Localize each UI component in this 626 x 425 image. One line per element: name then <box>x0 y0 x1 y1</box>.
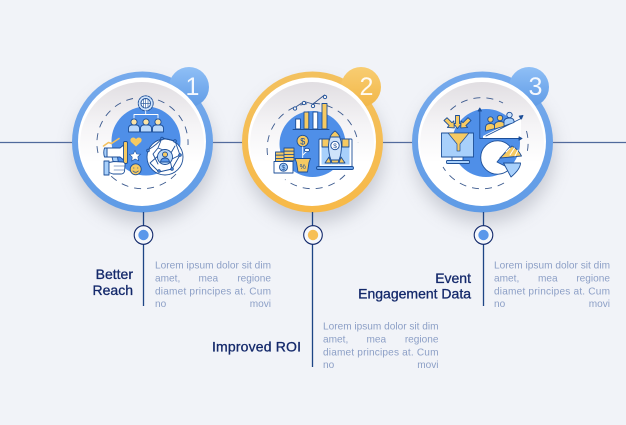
circle 2 <box>242 67 384 223</box>
circle 3 <box>412 67 554 223</box>
description 3: no <box>494 299 506 310</box>
badge number 3: 3 <box>529 73 542 101</box>
description 1: mea <box>198 274 219 284</box>
description 2: mea <box>366 334 387 346</box>
description 2: movi <box>417 360 438 371</box>
step 2: Improved ROI <box>212 67 439 371</box>
description 2: Lorem ipsum dolor sit dim <box>323 322 438 332</box>
icon: event engagement data <box>442 98 528 189</box>
description 1: diamet principes at. Cum <box>155 286 271 298</box>
description 3: movi <box>589 299 610 310</box>
connector line and node 3 <box>474 212 493 306</box>
title: Better Reach: Reach <box>93 282 133 298</box>
description 3: Lorem ipsum dolor sit dim <box>494 260 610 272</box>
title: Event Engagement Data: Event <box>435 270 471 286</box>
description 2: amet, <box>323 334 348 346</box>
icon: improved ROI: % <box>300 164 306 171</box>
description 1: no <box>155 299 167 310</box>
step 3: Event Engagement Data <box>358 67 610 310</box>
description 2: diamet principes at. Cum <box>323 348 438 358</box>
description 2: regione <box>405 334 439 346</box>
connector line and node 2 <box>304 212 322 367</box>
icon: improved ROI <box>267 95 358 189</box>
icon: better reach <box>97 96 188 189</box>
description 1: regione <box>237 274 271 284</box>
circle 1 <box>72 67 214 223</box>
description 3: amet, <box>494 274 519 284</box>
title: Event Engagement Data: Engagement Data <box>358 286 471 302</box>
title: Better Reach: Better <box>96 266 133 282</box>
description 2: no <box>323 360 335 371</box>
description 1: amet, <box>155 274 180 284</box>
description 3: mea <box>538 274 558 284</box>
horizontal timeline <box>0 142 626 144</box>
icon: improved ROI: $ <box>282 165 286 172</box>
badge number 1: 1 <box>186 73 199 101</box>
step 1: Better Reach <box>72 67 271 310</box>
description 1: movi <box>250 299 271 310</box>
description 3: regione <box>576 274 610 284</box>
badge number 2: 2 <box>360 73 373 101</box>
connector line and node 1 <box>134 212 153 306</box>
icon: improved ROI: $ <box>333 143 337 150</box>
icon: improved ROI: $ <box>300 136 305 146</box>
title: Improved ROI: Improved ROI <box>212 338 301 354</box>
description 3: diamet principes at. Cum <box>494 286 610 298</box>
description 1: Lorem ipsum dolor sit dim <box>155 260 271 272</box>
